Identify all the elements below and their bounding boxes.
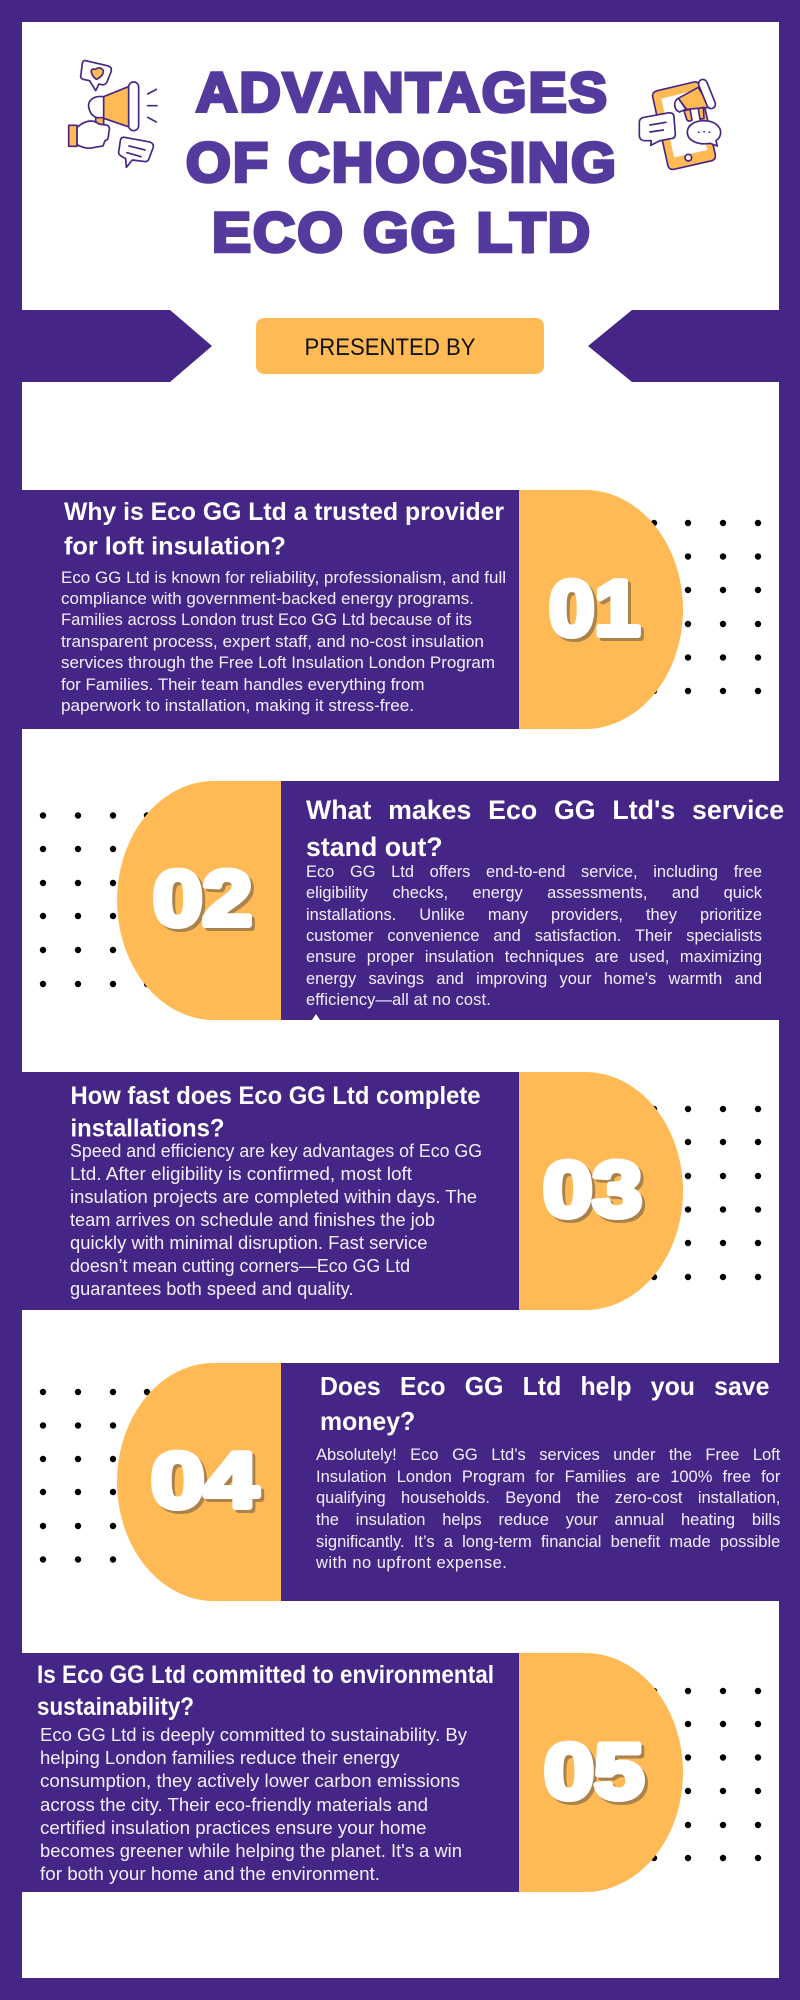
body text: Speed and efficiency are key advantages of Eco GG — [70, 1141, 482, 1161]
body text: eligibility checks, energy assessments, and quick — [306, 883, 762, 902]
header — [22, 60, 779, 382]
body text: with no upfront expense. — [316, 1553, 508, 1572]
body text — [61, 568, 506, 715]
body text: transparent process, expert staff, and no-cost insulation — [61, 632, 484, 651]
heading: for loft insulation? — [64, 532, 286, 560]
body text: insulation projects are completed within days. The — [70, 1187, 477, 1207]
purple text panel — [0, 1072, 519, 1310]
orange number tab — [117, 1363, 281, 1601]
body text: consumption, they actively lower carbon emissions — [40, 1771, 460, 1791]
body text: certified insulation practices ensure your home — [40, 1818, 426, 1838]
body text: for both your home and the environment. — [40, 1864, 380, 1884]
heading: Why is Eco GG Ltd a trusted provider — [64, 498, 504, 526]
left ribbon — [0, 310, 212, 382]
body text: Insulation London Program for Families are 100% free for — [316, 1467, 781, 1486]
body text: doesn’t mean cutting corners—Eco GG Ltd — [70, 1256, 410, 1276]
body text: across the city. Their eco-friendly materials and — [40, 1795, 428, 1815]
body text — [40, 1725, 467, 1884]
icon: hand holding megaphone — [69, 61, 157, 167]
heading: stand out? — [306, 832, 443, 862]
purple text panel — [0, 490, 519, 729]
number 05: 05 — [544, 1727, 644, 1815]
body text — [306, 862, 762, 1009]
presented by badge — [256, 318, 544, 374]
dot grid — [654, 523, 758, 691]
panel: section 01 — [22, 490, 762, 729]
body text: Ltd. After eligibility is confirmed, most loft — [70, 1164, 412, 1184]
body text: qualifying households. Beyond the zero-cost installation, — [316, 1488, 781, 1507]
body text: energy savings and improving your home's warmth and — [306, 969, 762, 988]
body text: becomes greener while helping the planet. It's a win — [40, 1841, 462, 1861]
number 02: 02 — [153, 854, 252, 942]
purple text panel — [0, 1653, 519, 1892]
orange number tab — [519, 1653, 683, 1892]
number 04: 04 — [151, 1436, 258, 1524]
panel: section 05 — [22, 1653, 762, 1892]
panel: section 03 — [22, 1072, 762, 1310]
body text: quickly with minimal disruption. Fast service — [70, 1233, 427, 1253]
body text: Absolutely! Eco GG Ltd’s services under the Free Loft — [316, 1445, 781, 1464]
body text: Eco GG Ltd is known for reliability, professionalism, and full — [61, 568, 506, 587]
heading — [306, 795, 784, 862]
number 01: 01 — [549, 564, 640, 652]
heading: Does Eco GG Ltd help you save — [320, 1371, 769, 1401]
title: ECO GG LTD — [212, 200, 592, 264]
body text: guarantees both speed and quality. — [70, 1279, 354, 1299]
heading — [64, 498, 504, 560]
heading — [320, 1371, 769, 1436]
body text: Eco GG Ltd offers end-to-end service, including free — [306, 862, 762, 881]
body text: efficiency—all at no cost. — [306, 990, 491, 1009]
body text — [70, 1141, 482, 1299]
body text: ensure proper insulation techniques are used, maximizing — [306, 947, 762, 966]
body text: installations. Unlike many providers, they prioritize — [306, 905, 762, 924]
purple text panel — [281, 1363, 800, 1601]
dot grid — [43, 816, 147, 984]
body text: helping London families reduce their energy — [40, 1748, 400, 1768]
title — [186, 60, 618, 264]
body text: customer convenience and satisfaction. Their specialists — [306, 926, 762, 945]
heading: money? — [320, 1406, 415, 1436]
body text: for Families. Their team handles everything from — [61, 675, 424, 694]
body text: compliance with government-backed energy programs. — [61, 589, 474, 608]
title: ADVANTAGES — [196, 60, 609, 124]
presented by badge: PRESENTED BY — [304, 334, 476, 361]
dot grid — [654, 1691, 758, 1858]
orange number tab — [519, 490, 683, 729]
body text: Eco GG Ltd is deeply committed to sustainability. By — [40, 1725, 467, 1745]
heading: installations? — [70, 1114, 224, 1142]
heading — [37, 1661, 494, 1721]
dot grid — [43, 1392, 147, 1560]
orange number tab — [519, 1072, 683, 1310]
orange number tab — [117, 781, 281, 1020]
body text: Families across London trust Eco GG Ltd because of its — [61, 610, 472, 629]
purple text panel — [281, 781, 800, 1020]
right ribbon — [588, 310, 800, 382]
panel: section 04 — [40, 1363, 781, 1601]
heading: Is Eco GG Ltd committed to environmental — [37, 1661, 494, 1689]
panel: section 02 — [40, 781, 784, 1020]
body text: significantly. It’s a long-term financial benefit made possible — [316, 1532, 781, 1551]
dot grid — [654, 1109, 758, 1277]
heading: sustainability? — [37, 1693, 194, 1721]
number 03: 03 — [543, 1145, 642, 1233]
heading: How fast does Eco GG Ltd complete — [70, 1082, 481, 1110]
heading: What makes Eco GG Ltd's service — [306, 795, 784, 825]
body text: the insulation helps reduce your annual heating bills — [316, 1510, 781, 1529]
body text: paperwork to installation, making it stress-free. — [61, 696, 414, 715]
small white mark — [312, 1014, 320, 1020]
heading — [70, 1082, 481, 1142]
body text: team arrives on schedule and finishes the job — [70, 1210, 435, 1230]
body text — [316, 1445, 781, 1572]
body text: services through the Free Loft Insulation London Program — [61, 653, 495, 672]
icon: phone with megaphone and chat bubbles — [639, 78, 721, 169]
title: OF CHOOSING — [186, 130, 618, 194]
